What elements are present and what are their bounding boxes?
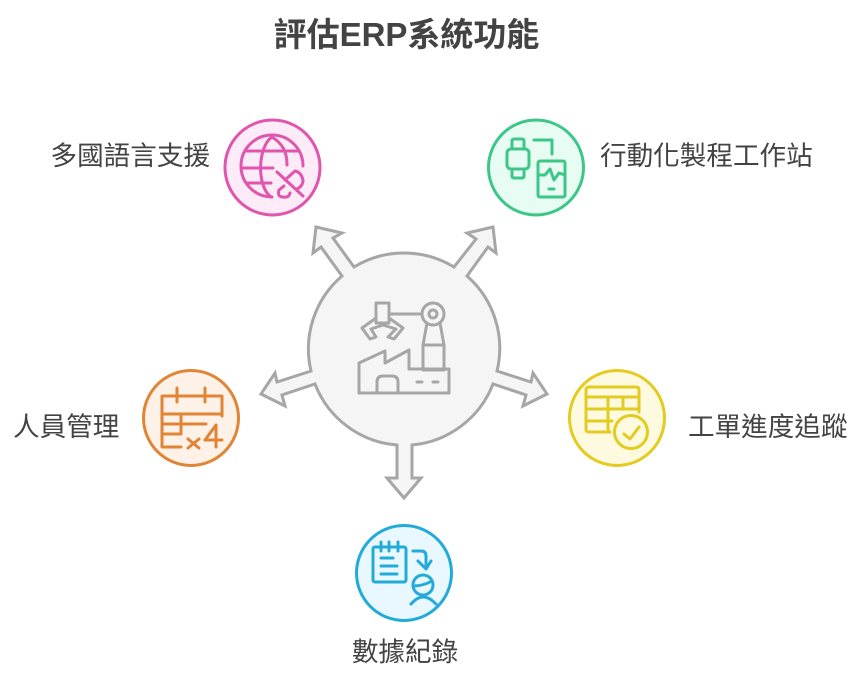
label: 人員管理 [13,412,119,442]
icon: globe with link [241,135,303,197]
circle [356,526,452,620]
node: data records [356,526,452,620]
icon: factory and robot arm [359,303,449,393]
icon: notepad and person [373,542,436,604]
icon: calendar table [162,388,222,448]
label: 多國語言支援 [50,141,210,171]
node: work order tracking [570,370,664,466]
label: 行動化製程工作站 [600,141,813,171]
icon: table with check [586,387,648,448]
node: personnel management [144,370,238,466]
circle [225,120,320,215]
circle [570,370,664,466]
circle [488,120,584,215]
title: 評估ERP系統功能 [274,16,539,53]
node: multilingual support [225,120,320,215]
central hub with five arrows [261,227,547,498]
label: 數據紀錄 [352,637,458,667]
circle [144,370,238,466]
icon: smartwatch and tablet [507,139,565,197]
label: 工單進度追蹤 [688,412,848,442]
node: mobile workstation [488,120,584,215]
